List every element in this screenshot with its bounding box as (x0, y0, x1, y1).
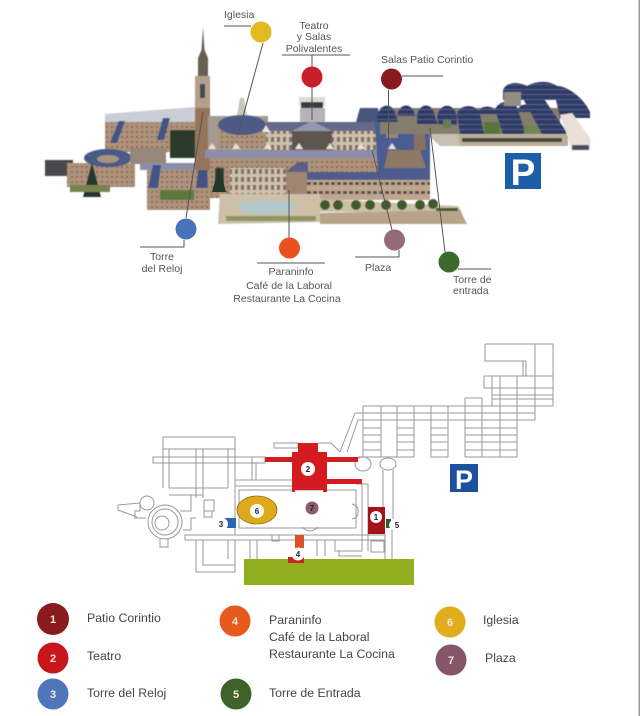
marker: Torre de entrada: Torre de (453, 274, 492, 286)
legend item 2: Teatro (87, 649, 121, 663)
plan: torre de entrada (386, 519, 400, 530)
floor plan (118, 344, 553, 585)
marker: Teatro (286, 20, 342, 88)
legend (37, 603, 519, 710)
marker: Iglesia (224, 9, 272, 42)
trees along the front (320, 199, 458, 211)
main body (205, 108, 430, 204)
rotunda wing (45, 148, 166, 197)
marker: Salas Patio Corintio: Salas Patio Corintio (381, 54, 473, 66)
page edge line (638, 0, 640, 716)
parking sign plan (450, 464, 478, 495)
rear left wing (105, 107, 196, 158)
aerial view of the building (45, 27, 590, 224)
legend item 4: Café de la Laboral (269, 630, 370, 644)
marker: Iglesia: Iglesia (224, 9, 255, 21)
plan: paraninfo (288, 535, 304, 563)
legend item 7: 7 (448, 655, 454, 667)
plan: parking grid (340, 344, 553, 457)
legend item 6: 6 (447, 617, 453, 629)
marker: Torre del Reloj: del Reloj (142, 263, 182, 275)
parking sign top: P (511, 152, 535, 193)
callout lines (140, 26, 491, 269)
marker: Paraninfo: Café de la Laboral (246, 280, 332, 292)
plan: patio corintio (368, 507, 385, 534)
legend item 6: Iglesia (483, 613, 519, 627)
legend item 4: 4 (232, 616, 239, 628)
plan: main building outline (153, 437, 400, 572)
marker: Torre del Reloj (142, 218, 196, 275)
legend item 3: Torre del Reloj (87, 686, 166, 700)
legend item 1 (37, 603, 161, 635)
legend item 4 (220, 606, 395, 661)
plan: green area (244, 559, 414, 585)
marker: Torre de entrada (438, 252, 492, 297)
plan: torre del reloj: 3 (219, 520, 224, 529)
marker: Teatro: y Salas (297, 31, 331, 43)
plan: torre de entrada: 5 (395, 521, 400, 530)
parking sign plan: P (455, 465, 473, 495)
plan: paraninfo: 4 (296, 550, 301, 559)
church dome (208, 98, 268, 150)
tree beside tower (212, 166, 226, 192)
marker: Torre de entrada: entrada (453, 285, 489, 297)
marker: Paraninfo: Paraninfo (269, 266, 314, 278)
marker: Teatro: Teatro (299, 20, 329, 32)
marker: Salas Patio Corintio (381, 54, 473, 90)
legend item 2: 2 (50, 653, 56, 665)
legend item 4: Restaurante La Cocina (269, 647, 395, 661)
plan: torre del reloj (216, 518, 236, 530)
parking sign top (505, 152, 541, 193)
plan: patio corintio: 1 (374, 513, 379, 522)
plan: church (237, 496, 277, 524)
legend item 6 (434, 606, 519, 638)
legend item 7: Plaza (485, 651, 516, 665)
legend item 3: 3 (50, 689, 56, 701)
legend item 5: 5 (233, 689, 239, 701)
marker: Torre del Reloj: Torre (150, 251, 174, 263)
plan: theatre (265, 443, 362, 492)
plan: church: 6 (255, 507, 260, 516)
marker: Teatro: Polivalentes (286, 43, 342, 55)
legend item 5 (220, 678, 361, 710)
marker: Plaza (365, 230, 405, 274)
plan: rotunda (118, 495, 214, 547)
theatre fly tower (299, 97, 325, 122)
legend item 1: Patio Corintio (87, 611, 161, 625)
terrace and pool (215, 168, 467, 224)
connection strip (430, 130, 462, 146)
legend item 7 (436, 644, 516, 676)
roof dormers (208, 143, 396, 149)
plan: theatre: 2 (306, 465, 311, 474)
legend item 5: Torre de Entrada (269, 686, 361, 700)
legend item 2 (38, 642, 121, 674)
marker: Plaza: Plaza (365, 262, 391, 274)
plan: plaza (306, 502, 318, 514)
clock tower (195, 27, 210, 170)
legend item 4: Paraninfo (269, 613, 322, 627)
parking roofs (377, 82, 590, 151)
front left block (140, 163, 210, 210)
marker: Paraninfo (233, 238, 341, 305)
legend item 3 (38, 678, 166, 710)
plan: plaza: 7 (310, 504, 315, 513)
marker: Paraninfo: Restaurante La Cocina (233, 293, 341, 305)
legend item 1: 1 (50, 614, 56, 626)
